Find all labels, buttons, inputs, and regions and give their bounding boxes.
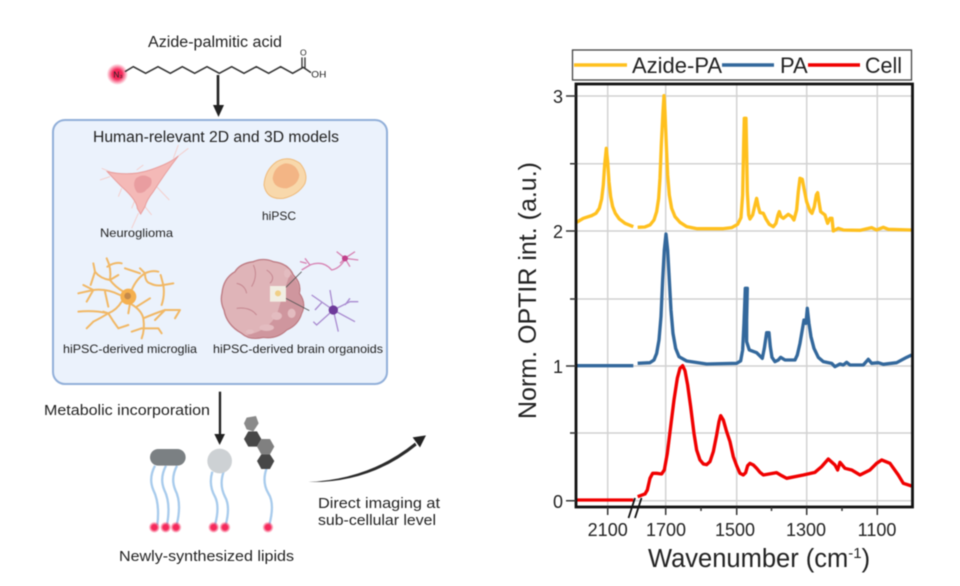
heading: models: Human-relevant 2D and 3D models bbox=[93, 129, 339, 146]
x-axis title: Wavenumber (cm bbox=[648, 545, 848, 573]
x-axis title: -1 bbox=[848, 545, 862, 562]
label: microglia: hiPSC-derived microglia bbox=[63, 342, 197, 356]
line: PA spectrum bbox=[576, 234, 912, 367]
y-axis tick labels: 3 bbox=[553, 87, 563, 107]
arrow: molecule to models bbox=[217, 75, 219, 107]
plot frame and ticks bbox=[566, 84, 912, 515]
x-axis title: ) bbox=[862, 545, 870, 573]
x-axis tick labels: 1300 bbox=[786, 520, 826, 540]
line: cell spectrum bbox=[576, 366, 912, 500]
y-axis tick labels: 2 bbox=[553, 222, 563, 242]
y-axis tick labels bbox=[553, 87, 563, 512]
x-axis tick labels: 1700 bbox=[646, 520, 686, 540]
lipid head: circle bbox=[207, 449, 232, 473]
x-axis tick labels: 1500 bbox=[715, 520, 755, 540]
icon: microglia bbox=[78, 258, 180, 338]
axis break marks bbox=[628, 498, 642, 518]
grid bbox=[577, 84, 912, 506]
panel: OPTIR spectra chart bbox=[514, 50, 912, 573]
label: direct imaging: Direct imaging at bbox=[318, 495, 441, 512]
legend: Azide-PA bbox=[632, 53, 722, 78]
x-axis tick labels bbox=[588, 520, 896, 540]
icon: hiPSC bbox=[264, 159, 306, 198]
molecule: azide-palmitic acid structure: N₃ bbox=[113, 69, 123, 79]
x-axis tick labels: 2100 bbox=[588, 520, 628, 540]
lipid tails bbox=[151, 466, 272, 525]
arrowhead: molecule to models bbox=[213, 105, 224, 117]
label: neuroglioma: Neuroglioma bbox=[100, 226, 173, 240]
label: direct imaging: sub-cellular level bbox=[318, 512, 436, 529]
panel background bbox=[53, 120, 387, 384]
label: newly-synthesized lipids: Newly-synthesized lipids bbox=[119, 548, 294, 565]
arrow: imaging bbox=[308, 435, 426, 482]
y-axis tick labels: 0 bbox=[553, 492, 563, 512]
panel: human-relevant models bbox=[53, 120, 387, 384]
azide tags bbox=[149, 522, 274, 533]
arrow: models to lipids bbox=[214, 392, 225, 445]
icon: neuroglioma cell bbox=[100, 145, 188, 228]
y-axis tick labels: 1 bbox=[553, 357, 563, 377]
label: metabolic incorporation: Metabolic incorporation bbox=[44, 402, 210, 419]
y-axis title: Norm. OPTIR int. (a.u.) bbox=[514, 162, 542, 419]
molecule: azide-palmitic acid structure bbox=[107, 47, 326, 85]
legend: Cell bbox=[865, 53, 902, 78]
lipid head: rounded bbox=[150, 449, 186, 466]
legend bbox=[572, 50, 912, 80]
x-axis tick labels: 1100 bbox=[858, 520, 896, 540]
label: brain organoids: hiPSC-derived brain organoids bbox=[213, 342, 383, 356]
molecule: azide-palmitic acid structure: OH bbox=[311, 69, 326, 79]
legend: PA bbox=[780, 53, 808, 78]
label: azide-palmitic acid: Azide-palmitic acid bbox=[148, 34, 282, 51]
lipids and arrows bbox=[149, 392, 426, 533]
molecule: azide-palmitic acid structure: O bbox=[300, 47, 307, 57]
label: hiPSC: hiPSC bbox=[262, 209, 296, 223]
panel: lipid workflow schematic bbox=[44, 34, 441, 565]
icon: brain organoid with neurons bbox=[221, 252, 358, 338]
line: azide-PA spectrum bbox=[577, 96, 912, 231]
lipid head: glycan hexagons bbox=[244, 416, 274, 469]
